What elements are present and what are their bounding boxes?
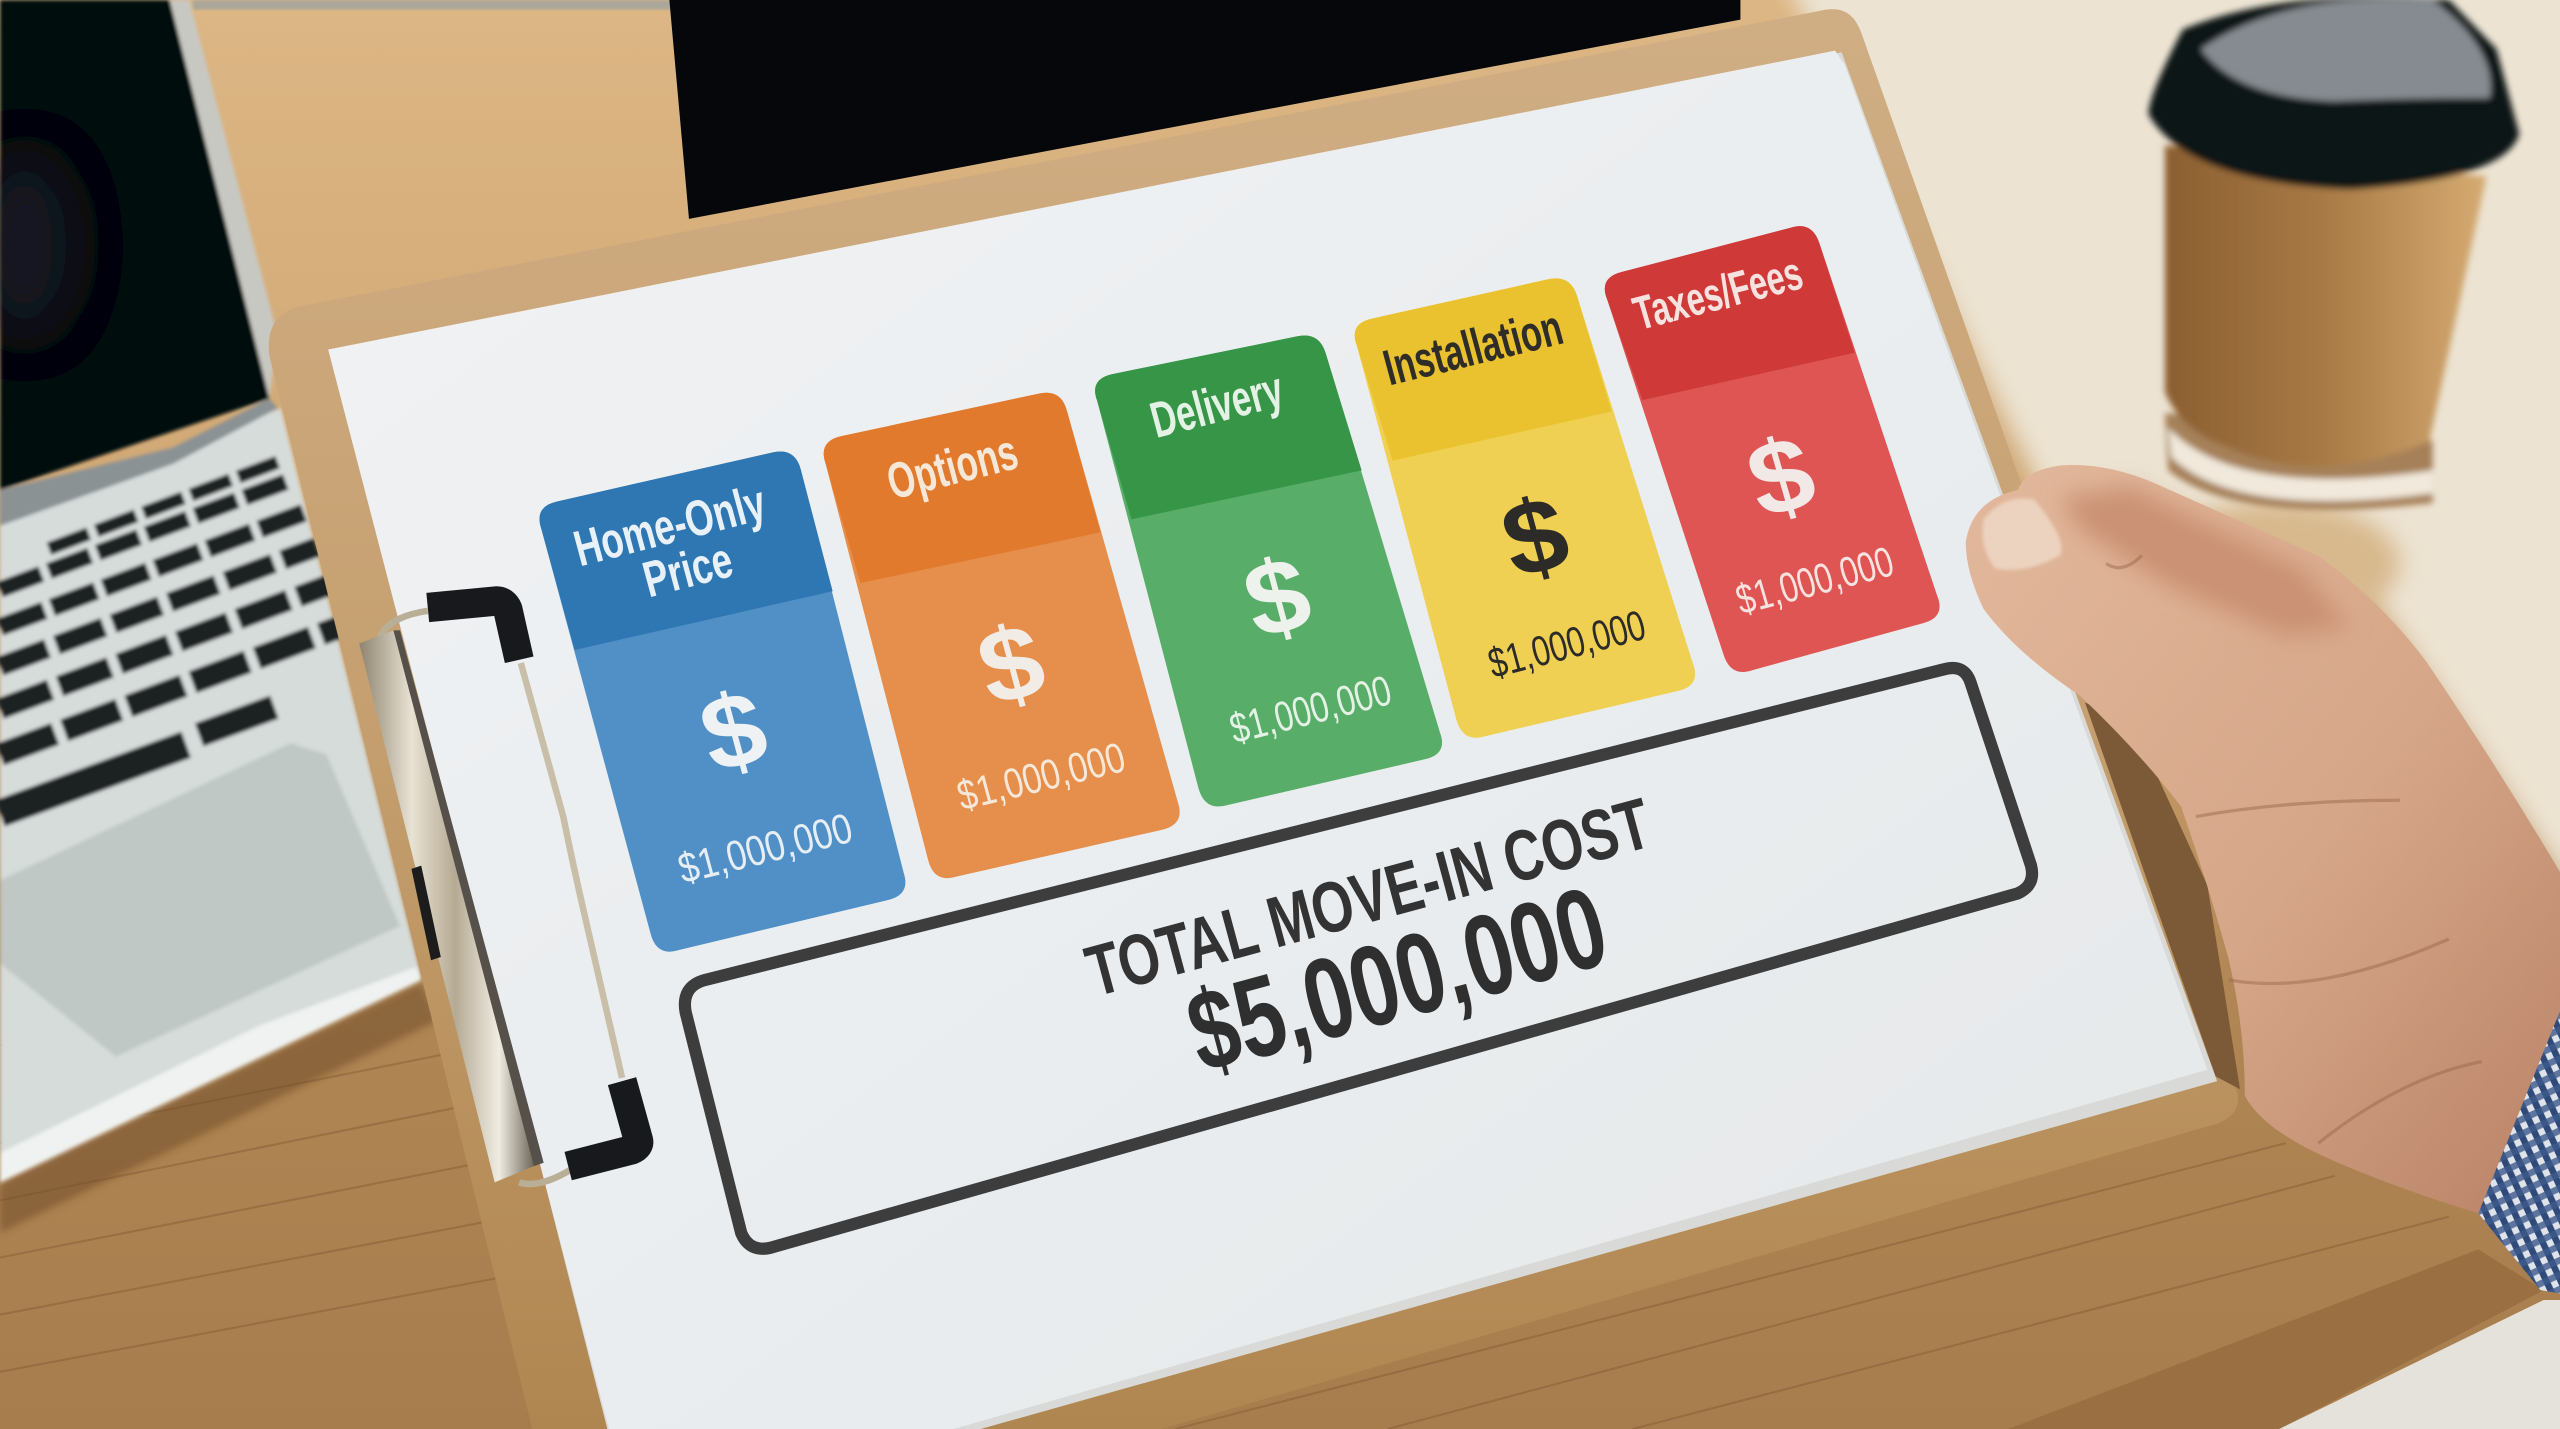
monitor in background — [669, 0, 1740, 219]
total value: $5,000,000 — [1175, 863, 1620, 1097]
card header — [1095, 336, 1362, 519]
card body — [1355, 278, 1695, 738]
laptop base — [0, 408, 421, 1179]
palm and fingers — [1966, 465, 2560, 1213]
clipboard board — [269, 9, 2238, 1429]
thumb nail — [1983, 498, 2061, 570]
heading: Installation — [1378, 300, 1569, 397]
card header — [1355, 278, 1611, 461]
card body — [1605, 226, 1940, 672]
bottom hook — [568, 1081, 639, 1166]
paper sheet — [328, 51, 2217, 1429]
card: Options — [824, 393, 1180, 878]
heading: Delivery — [1145, 362, 1289, 449]
shirt cuff — [2478, 1011, 2560, 1293]
card body — [824, 393, 1180, 878]
card: Home-Only Price — [539, 451, 905, 952]
top hook — [428, 601, 519, 660]
cup lid top — [2201, 0, 2491, 101]
dollar icon: $ — [1735, 412, 1827, 540]
coffee cup — [2149, 0, 2519, 510]
clipboard clip — [359, 601, 639, 1184]
laptop — [0, 0, 438, 1233]
heading line 2: Price — [637, 532, 739, 609]
card header — [824, 393, 1100, 583]
heading: Taxes/Fees — [1627, 246, 1808, 340]
laptop hinge — [0, 398, 278, 526]
wire arm — [521, 663, 622, 1078]
dollar icon: $ — [688, 668, 779, 795]
hand holding clipboard — [1966, 465, 2560, 1213]
keyboard — [0, 462, 340, 813]
laptop bezel — [170, 0, 278, 398]
amount: $1,000,000 — [1731, 537, 1899, 623]
laptop screen — [0, 0, 269, 490]
amount: $1,000,000 — [952, 734, 1130, 820]
card body — [539, 451, 905, 952]
wire rings — [379, 611, 571, 1184]
dollar icon: $ — [966, 601, 1056, 728]
dollar icon: $ — [1490, 473, 1580, 600]
total label: TOTAL MOVE-IN COST — [1078, 784, 1659, 1012]
amount: $1,000,000 — [673, 805, 858, 893]
trackpad — [0, 743, 400, 1057]
metal bar — [359, 630, 534, 1182]
index finger shadow — [2060, 487, 2351, 637]
total cost box — [685, 668, 2032, 1249]
laptop shadow on desk — [0, 983, 438, 1233]
cup base rings — [2165, 413, 2433, 510]
shadow gap beside paper — [2085, 702, 2240, 1089]
cup body — [2165, 145, 2487, 466]
dollar icon: $ — [1232, 534, 1322, 661]
card: Delivery — [1095, 336, 1442, 807]
card header — [539, 451, 833, 650]
card: Taxes/Fees — [1605, 226, 1940, 672]
amount: $1,000,000 — [1225, 668, 1397, 753]
floor beyond desk — [2279, 1300, 2560, 1429]
cup lid rim — [2149, 0, 2519, 189]
bar shadow — [393, 630, 544, 1166]
heading: Options — [881, 424, 1024, 511]
clip latch — [411, 866, 441, 960]
hand creases — [2106, 555, 2482, 1143]
laptop front edge — [0, 967, 421, 1182]
laptop screen reflection — [0, 155, 73, 335]
card header — [1605, 226, 1855, 400]
amount: $1,000,000 — [1483, 601, 1650, 687]
desk front edge — [2008, 1249, 2544, 1429]
card body — [1095, 336, 1442, 807]
cup white ring — [2168, 428, 2433, 501]
box outline — [685, 668, 2032, 1249]
card: Installation — [1355, 278, 1695, 738]
heading: Home-Only — [568, 475, 772, 578]
